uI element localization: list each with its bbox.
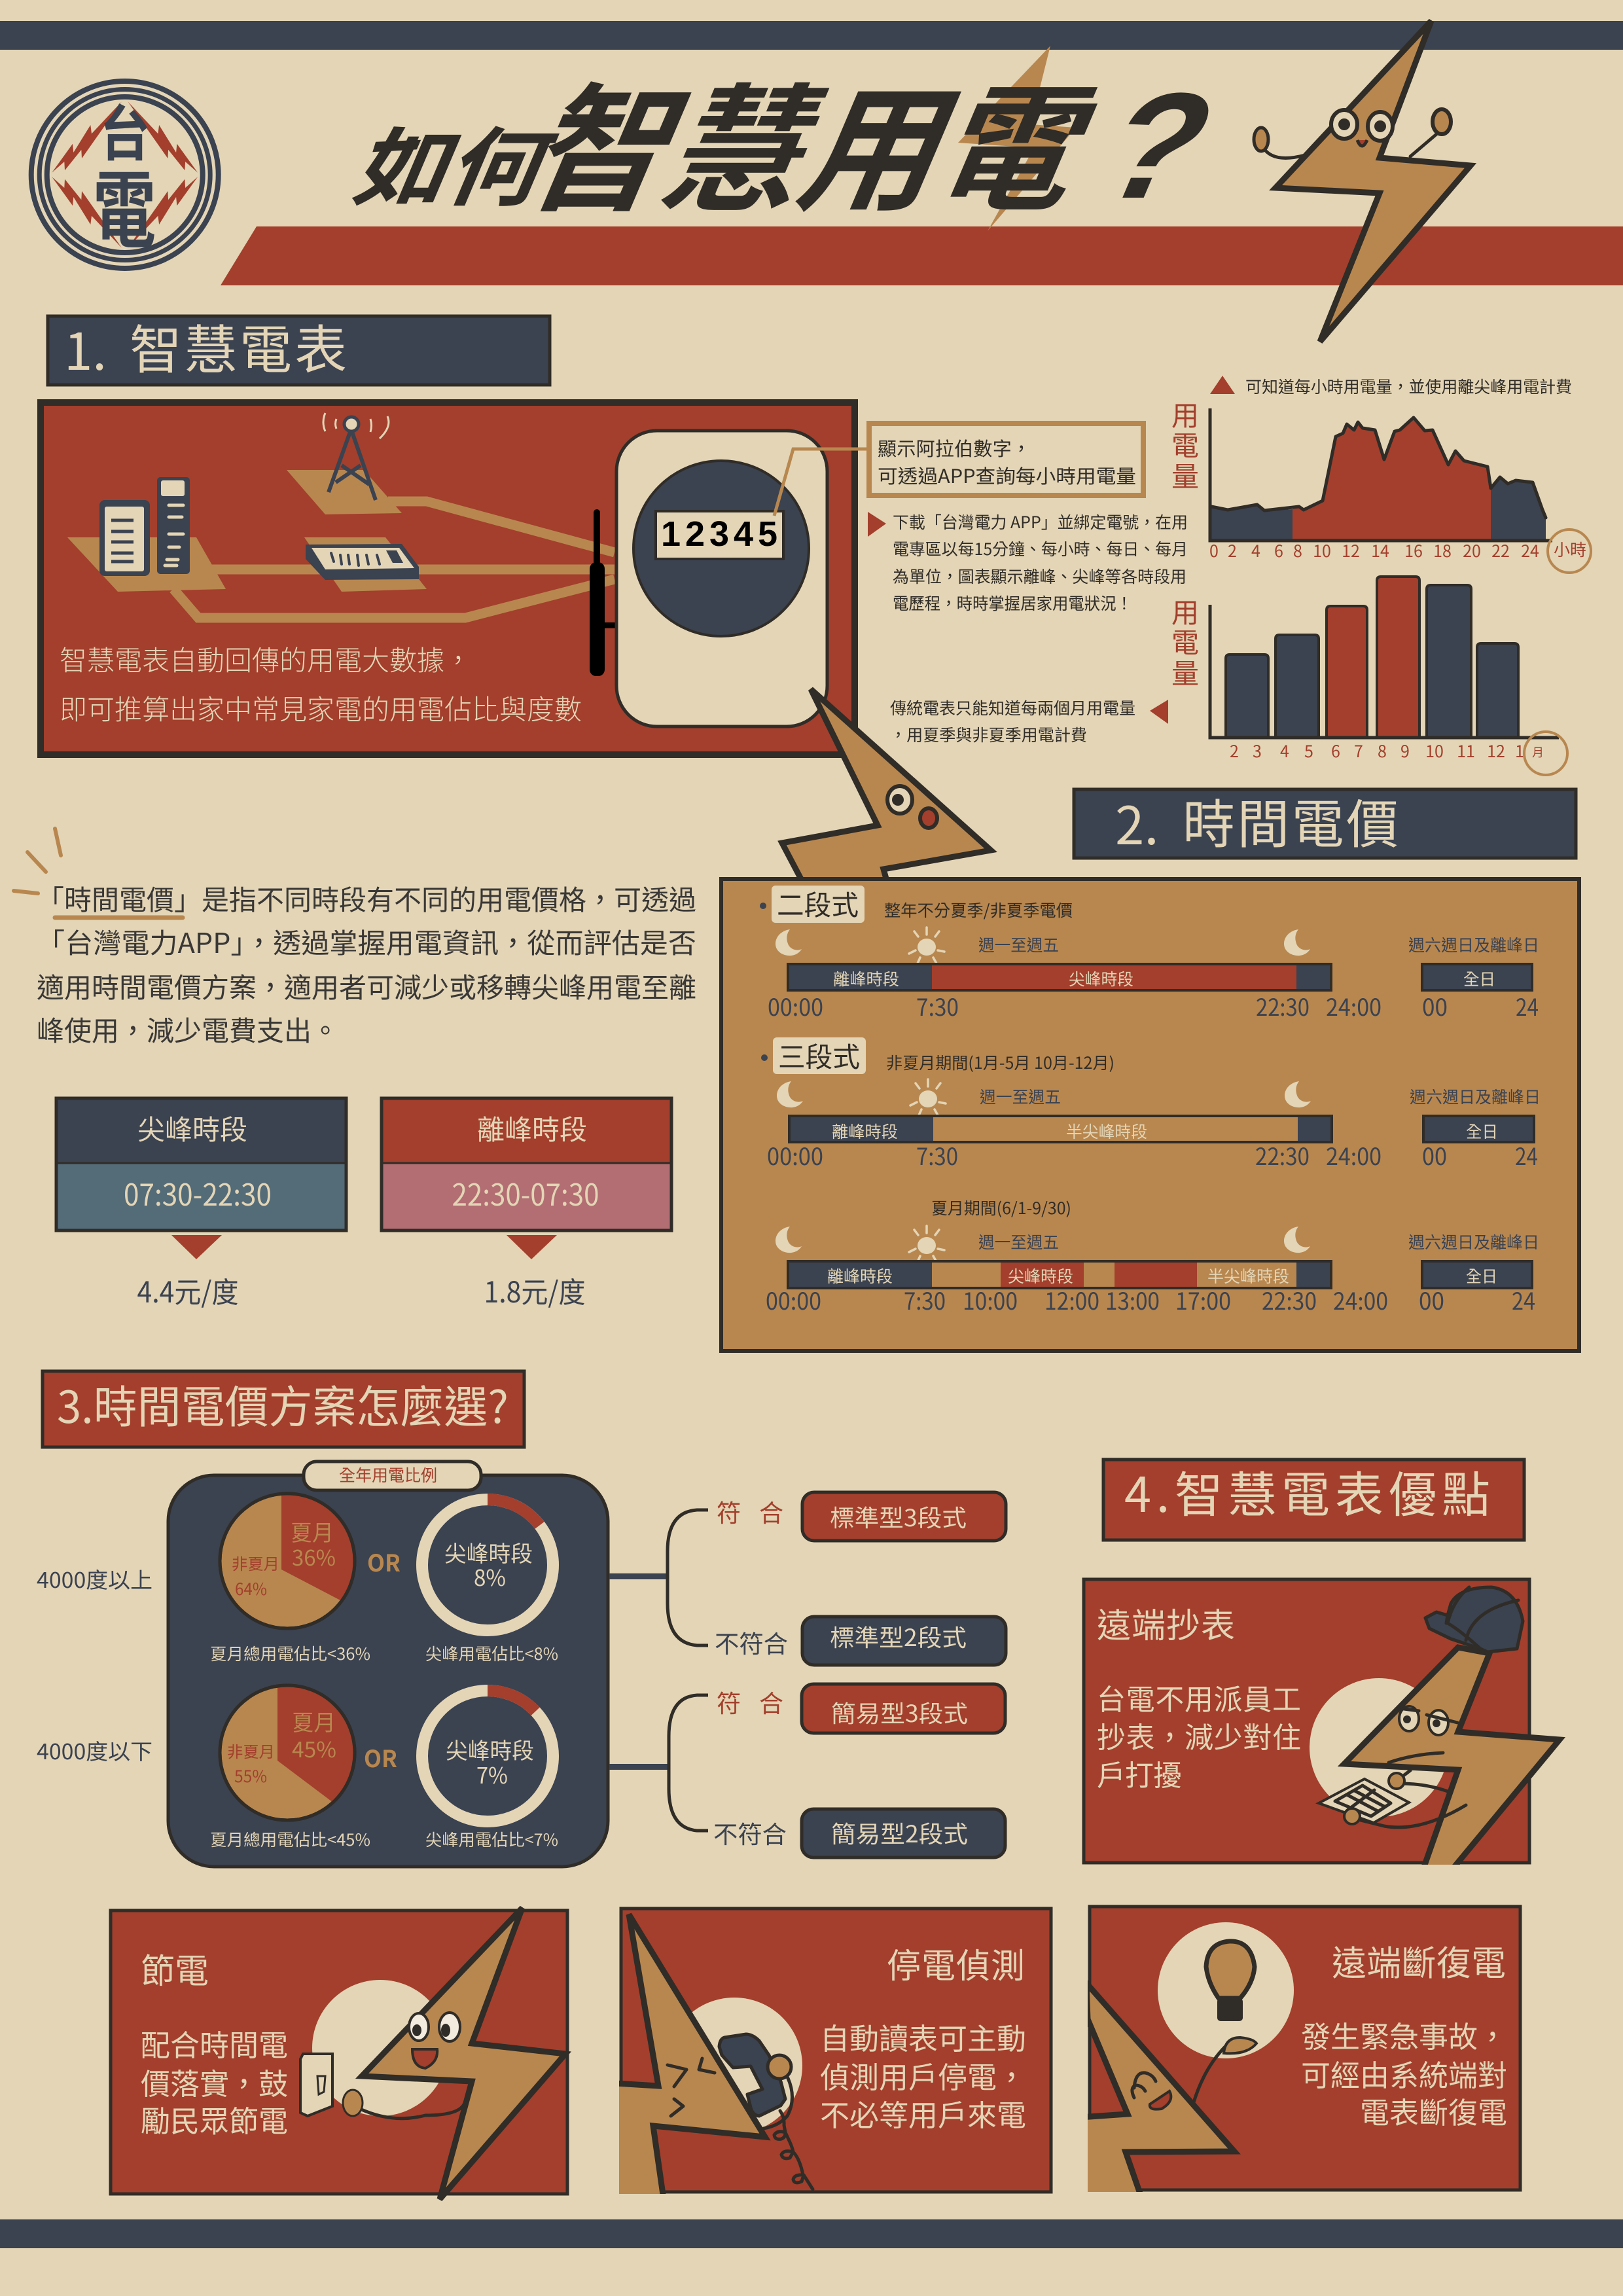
result: simple 3-tier bbox=[802, 1684, 1005, 1733]
rate card: peak: 4.4元/度 bbox=[137, 1269, 238, 1311]
label: OR: OR bbox=[367, 1545, 401, 1579]
area chart: hourly usage: 8 bbox=[1293, 539, 1302, 562]
bar chart: bimonthly usage: 12 bbox=[1487, 739, 1505, 762]
schedule: three-tier non-summer: 全日 bbox=[1466, 1119, 1498, 1143]
bar chart: bimonthly usage: 11 bbox=[1457, 739, 1475, 762]
result: standard 2-tier bbox=[802, 1617, 1006, 1665]
text block: download the app: 電歷程，時時掌握居家用電狀況！ bbox=[893, 591, 1132, 615]
bottom navy bar bbox=[0, 2219, 1623, 2248]
icon: spotlight circle bbox=[666, 1998, 802, 2134]
callout line bbox=[774, 449, 870, 516]
meter dial bbox=[633, 461, 809, 636]
labels: qualifies / does not qualify: 不符合 bbox=[713, 1815, 787, 1850]
heading: 2. time-of-use rates bbox=[1074, 783, 1576, 860]
schedule: three-tier non-summer: 週一至週五 bbox=[980, 1085, 1061, 1108]
bar chart: bimonthly usage bbox=[1210, 577, 1567, 775]
schedule: three-tier summer: 週六週日及離峰日 bbox=[1408, 1230, 1539, 1253]
bar chart: bimonthly usage: 月 bbox=[1532, 744, 1544, 761]
y label: usage: 用 bbox=[1171, 394, 1199, 434]
schedule: two-tier: 00:00 bbox=[768, 989, 823, 1023]
schedule: three-tier summer: 夏月期間(6/1-9/30) bbox=[931, 1196, 1071, 1219]
bar chart: bimonthly usage: 8 bbox=[1378, 739, 1387, 762]
panel: remote disconnect and reconnect: 可經由系統端對 bbox=[1301, 2052, 1507, 2094]
title: 如何 bbox=[339, 101, 576, 223]
panel: remote disconnect and reconnect bbox=[1080, 1907, 1520, 2199]
schedule: two-tier bbox=[760, 884, 1539, 1023]
panel: remote meter reading: 台電不用派員工 bbox=[1097, 1676, 1301, 1718]
text block: time-of-use explanation bbox=[37, 878, 696, 1049]
schedule: three-tier non-summer: 24:00 bbox=[1326, 1138, 1382, 1172]
text block: traditional meter: ，用夏季與非夏季用電計費 bbox=[890, 723, 1087, 746]
captions row 2: 尖峰用電佔比<7% bbox=[425, 1827, 558, 1851]
schedule: two-tier: 週六週日及離峰日 bbox=[1408, 933, 1539, 956]
mascot with idea bbox=[1080, 1983, 1257, 2199]
ring: peak 7% bbox=[422, 1691, 553, 1821]
schedule: three-tier non-summer: 22:30 bbox=[1255, 1138, 1310, 1172]
schedule: two-tier: 全日 bbox=[1463, 967, 1495, 990]
icon: decorative rays bbox=[14, 829, 61, 893]
area chart: hourly usage: 14 bbox=[1371, 539, 1389, 562]
schedule: three-tier non-summer: 半尖峰時段 bbox=[1066, 1119, 1147, 1143]
bar chart: bimonthly usage: 4 bbox=[1280, 739, 1289, 762]
schedule: three-tier summer: 7:30 bbox=[904, 1283, 946, 1317]
panel: energy saving bbox=[111, 1908, 567, 2199]
caption text bbox=[60, 639, 582, 728]
schedule: three-tier summer: 半尖峰時段 bbox=[1207, 1264, 1289, 1287]
schedule: three-tier summer bbox=[766, 1196, 1539, 1317]
schedule: three-tier summer: 離峰時段 bbox=[827, 1264, 893, 1287]
panel: annual usage ratio bbox=[168, 1462, 608, 1867]
icon: light bulb bbox=[1206, 1941, 1255, 2021]
schedule: three-tier summer: 00 bbox=[1419, 1283, 1444, 1317]
pie: summer 36%: 64% bbox=[235, 1577, 267, 1600]
y label: usage (bar chart): 量 bbox=[1171, 652, 1199, 692]
schedule: three-tier non-summer: 週六週日及離峰日 bbox=[1410, 1085, 1541, 1108]
schedule: three-tier non-summer: 非夏月期間(1月-5月 10月-12月) bbox=[886, 1050, 1115, 1074]
schedule: three-tier summer: 10:00 bbox=[963, 1283, 1018, 1317]
mascot with helmet bbox=[1319, 1647, 1560, 1869]
ring: peak 8% bbox=[422, 1499, 553, 1630]
y label: usage (bar chart): 電 bbox=[1171, 621, 1199, 661]
panel: time-of-use schedules bbox=[721, 879, 1579, 1351]
pie: summer 45% bbox=[220, 1685, 355, 1820]
caption text: 即可推算出家中常見家電的用電佔比與度數 bbox=[60, 688, 582, 728]
labels: qualifies / does not qualify bbox=[713, 1494, 788, 1850]
area chart: hourly usage: 2 bbox=[1228, 539, 1237, 562]
label: below 4000 kWh: 4000度以下 bbox=[37, 1734, 152, 1766]
mascot: peeking lightning character bbox=[782, 689, 991, 916]
ring: peak 7%: 尖峰時段 bbox=[446, 1733, 534, 1765]
schedule: three-tier summer: 24 bbox=[1512, 1283, 1535, 1317]
title: 智慧用電 bbox=[505, 41, 1132, 239]
text block: download the app bbox=[868, 510, 1188, 615]
schedule: three-tier summer: 17:00 bbox=[1175, 1283, 1231, 1317]
bar chart: bimonthly usage: 1 bbox=[1515, 739, 1524, 762]
labels: qualifies / does not qualify: 符 bbox=[717, 1684, 741, 1719]
result: simple 3-tier: 簡易型3段式 bbox=[831, 1695, 968, 1729]
pie: summer 36%: 36% bbox=[292, 1541, 336, 1572]
top navy bar bbox=[0, 21, 1623, 50]
area chart: hourly usage: 12 bbox=[1342, 539, 1360, 562]
icon: home devices bbox=[99, 477, 190, 576]
schedule: three-tier non-summer: 三段式 bbox=[778, 1035, 860, 1075]
schedule: three-tier summer: 尖峰時段 bbox=[1008, 1264, 1073, 1287]
result: standard 2-tier: 標準型2段式 bbox=[830, 1619, 967, 1653]
area chart: hourly usage: 10 bbox=[1313, 539, 1331, 562]
text block: time-of-use explanation: 峰使用，減少電費支出。 bbox=[37, 1009, 339, 1049]
icon: thought bubble bbox=[1158, 1922, 1294, 2058]
text block: time-of-use explanation: 「時間電價」是指不同時段有不同的用電價格，可透過 bbox=[37, 878, 696, 918]
title: ? bbox=[1077, 62, 1240, 230]
schedule: two-tier: 尖峰時段 bbox=[1069, 967, 1133, 990]
tag: annual usage ratio: 全年用電比例 bbox=[339, 1463, 437, 1486]
icon: signal tower bbox=[323, 413, 389, 500]
area chart: hourly usage: 小時 bbox=[1554, 537, 1586, 561]
logo: Taipower emblem bbox=[31, 81, 219, 268]
text block: download the app: 下載「台灣電力 APP」並綁定電號，在用 bbox=[893, 510, 1188, 533]
area chart: hourly usage: 20 bbox=[1463, 539, 1481, 562]
rate card: peak bbox=[56, 1098, 346, 1311]
y label: usage: 電 bbox=[1171, 424, 1199, 464]
schedule: three-tier summer: 00:00 bbox=[766, 1283, 821, 1317]
schedule: three-tier summer: 全日 bbox=[1466, 1264, 1497, 1287]
icon: spotlight circle bbox=[312, 1980, 448, 2116]
pie: summer 36% bbox=[220, 1494, 355, 1628]
schedule: two-tier: 24:00 bbox=[1326, 989, 1382, 1023]
panel: energy saving: 勵民眾節電 bbox=[141, 2098, 288, 2140]
text block: time-of-use explanation: 適用時間電價方案，適用者可減少或移轉尖峰用電至離 bbox=[37, 966, 696, 1006]
captions row 1 bbox=[210, 1641, 558, 1665]
tan platforms bbox=[67, 470, 427, 592]
panel: remote meter reading: 戶打擾 bbox=[1097, 1752, 1182, 1794]
area chart: hourly usage: 24 bbox=[1521, 539, 1539, 562]
heading: 1. smart meter: 1. bbox=[64, 312, 107, 385]
icon: wall mount bar bbox=[590, 509, 616, 676]
callout: arabic digits bbox=[869, 423, 1143, 495]
result: standard 3-tier bbox=[802, 1492, 1006, 1541]
meter digital display: 12345 bbox=[661, 514, 777, 554]
label: above 4000 kWh: 4000度以上 bbox=[37, 1563, 152, 1594]
bar chart: bimonthly usage: 3 bbox=[1253, 739, 1262, 762]
callout: arabic digits: 顯示阿拉伯數字， bbox=[878, 434, 1031, 461]
rate card: off-peak: 1.8元/度 bbox=[484, 1269, 585, 1311]
text block: time-of-use explanation: 「台灣電力APP」，透過掌握用電資訊，從而評估是否 bbox=[37, 922, 696, 961]
connector: upper bracket bbox=[609, 1510, 708, 1645]
schedule: two-tier: 00 bbox=[1422, 989, 1448, 1023]
icon: modem bbox=[306, 544, 419, 580]
schedule: three-tier summer: 週一至週五 bbox=[978, 1230, 1059, 1253]
schedule: two-tier: 週一至週五 bbox=[978, 933, 1059, 956]
callout: arabic digits: 可透過APP查詢每小時用電量 bbox=[878, 461, 1136, 489]
y label: usage (bar chart): 用 bbox=[1171, 591, 1199, 631]
result: standard 3-tier: 標準型3段式 bbox=[830, 1499, 967, 1534]
captions row 2: 夏月總用電佔比<45% bbox=[210, 1827, 370, 1851]
pie: summer 45%: 非夏月 bbox=[227, 1739, 275, 1762]
red title band bbox=[221, 226, 1623, 285]
connector: lower bracket bbox=[609, 1695, 708, 1831]
captions row 1: 尖峰用電佔比<8% bbox=[425, 1641, 558, 1665]
schedule: three-tier non-summer: 00:00 bbox=[767, 1138, 823, 1172]
schedule: two-tier: 二段式 bbox=[777, 884, 859, 924]
panel: remote meter reading: 抄表，減少對住 bbox=[1097, 1714, 1301, 1756]
ring: peak 8%: 8% bbox=[474, 1560, 506, 1592]
panel: outage detection: 停電偵測 bbox=[887, 1939, 1025, 1988]
pie: summer 45%: 55% bbox=[234, 1764, 267, 1787]
heading: 1. smart meter bbox=[48, 308, 550, 385]
rate card: off-peak: 22:30-07:30 bbox=[452, 1172, 599, 1215]
pie: summer 45%: 45% bbox=[292, 1732, 336, 1764]
caption text: 智慧電表自動回傳的用電大數據， bbox=[60, 639, 472, 679]
meter body bbox=[616, 431, 827, 726]
heading: 1. smart meter: 智慧電表 bbox=[130, 308, 347, 384]
mascot on the phone bbox=[615, 1914, 813, 2199]
bar chart: bimonthly usage: 2 bbox=[1230, 739, 1239, 762]
mascot: top lightning character bbox=[1254, 21, 1471, 342]
schedule: two-tier: 24 bbox=[1516, 989, 1539, 1023]
heading: 3. how to choose a plan: 3.時間電價方案怎麼選? bbox=[57, 1371, 508, 1436]
panel: outage detection: 不必等用戶來電 bbox=[820, 2092, 1026, 2134]
rate card: off-peak: 離峰時段 bbox=[477, 1108, 587, 1148]
bar chart: bimonthly usage: 5 bbox=[1304, 739, 1313, 762]
panel: remote meter reading bbox=[1084, 1579, 1560, 1869]
schedule: two-tier: 離峰時段 bbox=[833, 967, 899, 990]
text block: hourly chart note: 可知道每小時用電量，並使用離尖峰用電計費 bbox=[1245, 374, 1572, 398]
schedule: three-tier non-summer: 離峰時段 bbox=[832, 1119, 898, 1143]
schedule: three-tier non-summer: 00 bbox=[1422, 1138, 1447, 1172]
captions row 1: 夏月總用電佔比<36% bbox=[210, 1641, 370, 1665]
text block: traditional meter bbox=[890, 696, 1168, 746]
text block: download the app: 為單位，圖表顯示離峰、尖峰等各時段用 bbox=[893, 564, 1186, 588]
schedule: three-tier non-summer bbox=[761, 1035, 1541, 1172]
pie: summer 45%: 夏月 bbox=[292, 1705, 336, 1737]
panel: remote disconnect and reconnect: 遠端斷復電 bbox=[1332, 1936, 1506, 1986]
bar chart: bimonthly usage: 7 bbox=[1354, 739, 1363, 762]
area chart: hourly usage: 16 bbox=[1404, 539, 1423, 562]
text block: traditional meter: 傳統電表只能知道每兩個月用電量 bbox=[890, 696, 1135, 719]
area chart: hourly usage: 22 bbox=[1491, 539, 1510, 562]
y label: usage bbox=[1171, 394, 1199, 495]
icon: spotlight circle bbox=[1310, 1678, 1448, 1817]
schedule: three-tier summer: 24:00 bbox=[1333, 1283, 1388, 1317]
schedule: three-tier summer: 12:00 bbox=[1044, 1283, 1099, 1317]
panel: outage detection: 偵測用戶停電， bbox=[820, 2054, 1026, 2096]
panel: outage detection: 自動讀表可主動 bbox=[820, 2015, 1026, 2058]
schedule: three-tier summer: 13:00 bbox=[1105, 1283, 1160, 1317]
rate card: off-peak bbox=[382, 1098, 671, 1311]
icon: helmet bbox=[1425, 1587, 1523, 1652]
area chart: hourly usage: 4 bbox=[1251, 539, 1260, 562]
panel: outage detection bbox=[615, 1909, 1051, 2199]
y label: usage (bar chart) bbox=[1171, 591, 1199, 692]
text block: download the app: 電專區以每15分鐘、每小時、每日、每月 bbox=[893, 537, 1188, 560]
ring: peak 8%: 尖峰時段 bbox=[444, 1536, 533, 1568]
labels: qualifies / does not qualify: 合 bbox=[759, 1494, 783, 1529]
schedule: two-tier: 22:30 bbox=[1256, 989, 1310, 1023]
result: simple 2-tier bbox=[802, 1809, 1005, 1857]
schedule: three-tier non-summer: 7:30 bbox=[916, 1138, 958, 1172]
panel: remote disconnect and reconnect: 電表斷復電 bbox=[1360, 2089, 1507, 2132]
label: OR: OR bbox=[364, 1740, 397, 1774]
panel: energy saving: 節電 bbox=[141, 1944, 209, 1993]
bar chart: bimonthly usage: 9 bbox=[1400, 739, 1410, 762]
icon: tan lightning behind the title bbox=[958, 46, 1076, 231]
area chart: hourly usage: 0 bbox=[1209, 539, 1219, 562]
pie: summer 36%: 夏月 bbox=[291, 1515, 334, 1547]
bar chart: bimonthly usage: 10 bbox=[1425, 739, 1444, 762]
labels: qualifies / does not qualify: 不符合 bbox=[715, 1624, 788, 1660]
rate card: peak: 尖峰時段 bbox=[137, 1108, 247, 1148]
labels: qualifies / does not qualify: 合 bbox=[759, 1684, 783, 1719]
schedule: three-tier summer: 22:30 bbox=[1262, 1283, 1317, 1317]
area chart: hourly usage: 6 bbox=[1274, 539, 1283, 562]
panel: energy saving: 價落實，鼓 bbox=[141, 2060, 288, 2103]
logo: Taipower emblem: 台 bbox=[99, 87, 151, 173]
panel: remote disconnect and reconnect: 發生緊急事故， bbox=[1301, 2013, 1507, 2056]
heading: 4. smart meter advantages: 4.智慧電表優點 bbox=[1124, 1456, 1490, 1526]
panel: smart meter network diagram bbox=[41, 403, 855, 755]
heading: 2. time-of-use rates: 時間電價 bbox=[1183, 783, 1399, 859]
pie: summer 36%: 非夏月 bbox=[232, 1551, 279, 1574]
captions row 2 bbox=[210, 1827, 558, 1851]
mascot at light switch bbox=[300, 1908, 565, 2199]
logo: Taipower emblem: 電 bbox=[93, 143, 156, 265]
underline highlight bbox=[55, 915, 183, 920]
bar chart: bimonthly usage: 6 bbox=[1331, 739, 1340, 762]
panel: remote meter reading: 遠端抄表 bbox=[1097, 1598, 1235, 1647]
result: simple 2-tier: 簡易型2段式 bbox=[831, 1816, 968, 1850]
panel: energy saving: 配合時間電 bbox=[141, 2022, 288, 2064]
schedule: two-tier: 7:30 bbox=[916, 989, 959, 1023]
schedule: three-tier non-summer: 24 bbox=[1515, 1138, 1538, 1172]
rate card: peak: 07:30-22:30 bbox=[124, 1172, 272, 1215]
tan network lines bbox=[173, 501, 615, 618]
area chart: hourly usage bbox=[1209, 408, 1591, 573]
area chart: hourly usage: 18 bbox=[1433, 539, 1452, 562]
ring: peak 7%: 7% bbox=[476, 1758, 508, 1790]
heading: 2. time-of-use rates: 2. bbox=[1115, 784, 1159, 860]
y label: usage: 量 bbox=[1171, 455, 1199, 495]
tag: annual usage ratio bbox=[304, 1462, 481, 1490]
labels: qualifies / does not qualify: 符 bbox=[717, 1494, 741, 1529]
schedule: two-tier: 整年不分夏季/非夏季電價 bbox=[884, 898, 1073, 922]
